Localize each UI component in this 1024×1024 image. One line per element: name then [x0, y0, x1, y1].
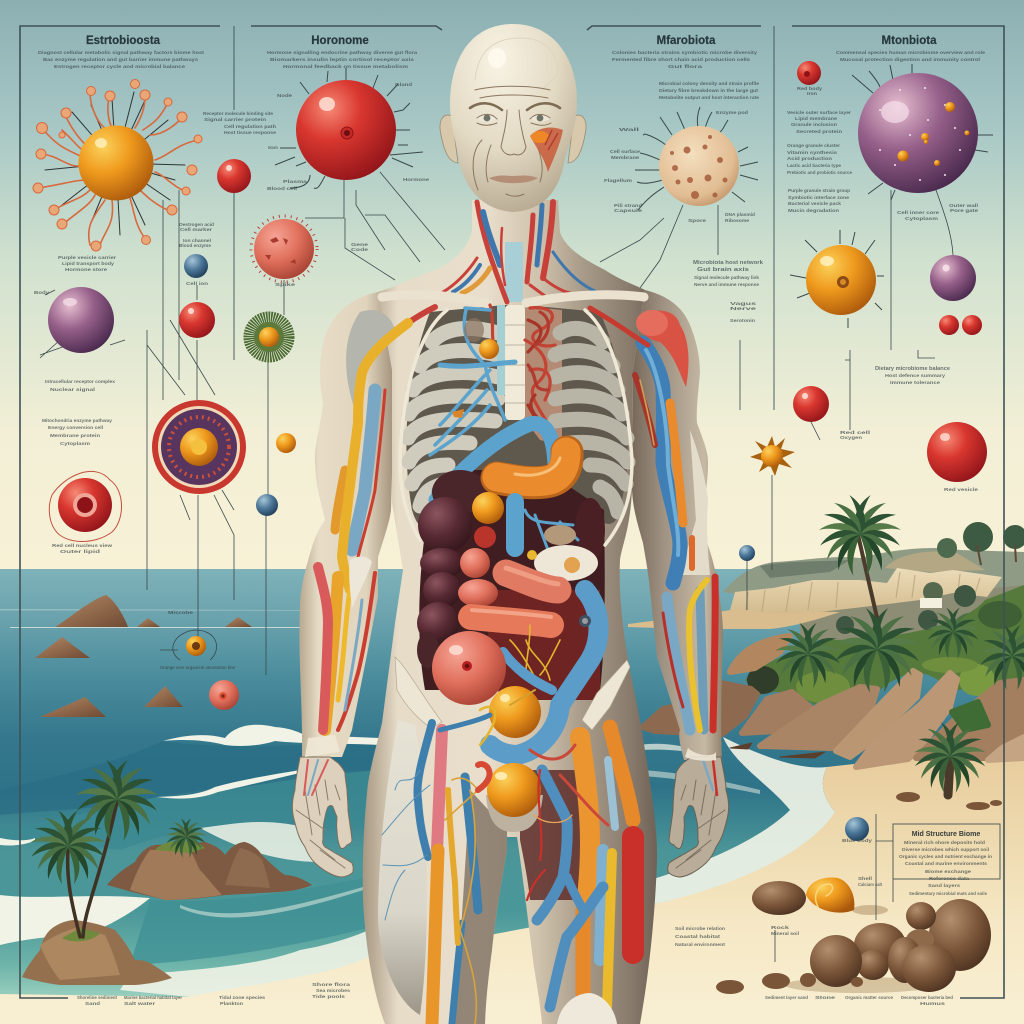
right arm vessels [590, 308, 715, 730]
annotation text: right columns: Enzyme pod [716, 110, 748, 115]
icon: ringed cell diagram [152, 400, 246, 494]
beach [0, 745, 1024, 1024]
annotation text: left columns: Node [277, 93, 293, 98]
annotation text: right columns: Soil microbe relation [675, 926, 725, 931]
intestines [458, 548, 558, 625]
annotation text: right columns: Cell surface [610, 149, 641, 154]
annotation text: right columns: Cytoplasm [905, 216, 938, 221]
annotation text: right columns: Granule inclusion [791, 122, 837, 127]
coastal rocks [643, 636, 1024, 767]
annotation text: left columns: Gland [395, 82, 412, 87]
annotation text: left columns: Orange core organism annotation line [160, 665, 235, 670]
annotation text: right columns: Tide pools [312, 994, 346, 999]
heading: column 1: Estrtobioosta [86, 35, 161, 47]
intro text blocks: Estrogen receptor cycle and microbial balance [54, 64, 186, 69]
annotation text: right columns: Organic matter source [845, 995, 893, 1000]
neck vessels [443, 202, 597, 302]
annotation text: left columns: Cytoplasm [60, 441, 90, 446]
annotation text: left columns: Shoreline sediment [77, 995, 117, 1000]
distant sand spit and hills [628, 522, 1024, 640]
palm trees: coast [775, 606, 1024, 795]
annotation text: right columns: Coastal habitat [675, 934, 721, 939]
annotation text: left columns: Ion channel [183, 238, 211, 243]
sea rocks left [35, 595, 252, 717]
background sky [0, 0, 1024, 575]
annotation text: right columns: Shell [858, 876, 872, 881]
annotation text: right columns: Calcium salt [858, 882, 882, 887]
icon: small red cell top right [797, 61, 821, 85]
annotation text: left columns: Ion [268, 145, 278, 150]
annotation text: left columns: Sand [85, 1001, 100, 1006]
annotation text: left columns: Cell ion [186, 281, 208, 286]
annotation text: right columns: Microbiota host network [693, 260, 764, 266]
annotation text: right columns: Sediment layer sand [765, 995, 808, 1000]
callout box: Sedimentary microbial mats and soils [909, 891, 987, 896]
left hand [292, 757, 353, 877]
annotation text: right columns: Vesicle outer surface layer [787, 110, 851, 115]
annotation text: right columns: Gut brain axis [697, 267, 749, 273]
white bone at leg bottom [557, 993, 617, 1024]
annotation text: right columns: Ribosome [725, 218, 749, 223]
annotation text: left columns: Microbe [168, 610, 194, 615]
annotation text: right columns: Nerve and immune response [694, 282, 759, 287]
icon: orange shell [806, 878, 888, 915]
annotation text: right columns: Microbial colony density and strain profile [659, 81, 759, 86]
heading: column 4: Mtonbiota [882, 35, 937, 47]
icon: purple sphere right [930, 255, 976, 301]
left shoulder cap [346, 310, 395, 407]
annotation text: right columns: Spore [688, 218, 707, 223]
abdomen red backdrop [480, 590, 600, 700]
annotation text: right columns: Purple granule strain group [788, 188, 850, 193]
pelvic bowl [486, 795, 543, 832]
annotation text: right columns: Wall [619, 127, 639, 132]
palm tree: cliff top [818, 493, 902, 622]
annotation text: right columns: Dietary fibre breakdown in the large gut [659, 88, 759, 93]
red vessel network [490, 305, 557, 445]
icon: small blue sphere right [739, 545, 755, 561]
abdomen cavity [419, 470, 605, 690]
wrist bands [305, 735, 716, 761]
icon: small red sphere [217, 159, 251, 193]
intro text blocks: Gut flora [668, 64, 703, 69]
annotation text: left columns: Plasma [283, 179, 308, 184]
annotation text: right columns: Cell inner core [897, 210, 940, 215]
icon: red sphere small 2 [179, 302, 215, 338]
annotation text: right columns: Lipid membrane [795, 116, 838, 121]
annotation text: right columns: Sea microbes [316, 988, 350, 993]
annotation text: left columns: Code [351, 247, 369, 252]
annotation text: right columns: Humus [920, 1001, 946, 1006]
annotation text: right columns: Orange granule cluster [787, 143, 840, 148]
annotation text: right columns: Dietary microbiome balance [875, 366, 950, 372]
annotation text: left columns: Gene [351, 242, 369, 247]
orange organ sphere [489, 686, 541, 738]
callout box: Sand layers [928, 883, 961, 888]
annotation text: left columns: Membrane protein [50, 433, 100, 438]
backdrop behind red vessels [525, 306, 562, 445]
intro text blocks: Hormone signalling endocrine pathway diverse gut flora [267, 50, 418, 55]
annotation text: right columns: Bacterial vesicle pack [788, 201, 841, 206]
annotation text: right columns: Natural environment [675, 942, 726, 947]
wave bands [0, 741, 380, 965]
orange stomach [497, 452, 567, 483]
annotation text: right columns: Signal molecule pathway link [694, 275, 759, 280]
annotation text: right columns: Nerve [730, 306, 757, 311]
left arm [299, 292, 395, 757]
chest cavity [406, 305, 628, 527]
annotation text: right columns: Iron [807, 91, 817, 96]
annotation text: right columns: Mineral soil [771, 931, 799, 936]
callout box: Diverse microbes which support soil [902, 847, 989, 852]
annotation text: right columns: Acid production [787, 156, 832, 161]
annotation text: left columns: Cell regulation path [224, 124, 276, 129]
intro text blocks: Biomarkers insulin leptin cortisol receptor axis [270, 57, 415, 62]
annotation text: left columns: Intracellular receptor complex [45, 379, 115, 384]
annotation text: right columns: Flagellum [604, 178, 632, 183]
large blue duct [490, 590, 598, 755]
callout box: Mineral rich shore deposits hold [904, 840, 985, 845]
icon: red cell with squiggle outline [49, 471, 122, 542]
icon: orange microbe with swirl [790, 230, 884, 328]
callout box: Coastal and marine environments [905, 861, 987, 866]
icon: small orange sphere [276, 433, 296, 453]
icon: blue sphere beach [845, 817, 869, 841]
callout box: Biome exchange [925, 869, 972, 874]
intro text blocks: Mucosal protection digestion and immunity control [840, 57, 980, 62]
intro text blocks: Fermented fibre short chain acid production cells [612, 57, 751, 62]
shoulder muscle red [636, 310, 688, 387]
icon: green spiky microbe [249, 317, 289, 357]
annotation text: left columns: Purple vesicle carrier [58, 255, 116, 260]
icon: large red sphere right [927, 422, 987, 482]
torso and legs [363, 200, 657, 1024]
duct nucleus [579, 615, 591, 627]
annotation text: right columns: Red cell [840, 430, 870, 435]
annotation text: left columns: Body [34, 290, 50, 295]
foreground rock island with palms [22, 758, 312, 985]
right arm [632, 290, 723, 760]
annotation text: left columns: Spike [275, 282, 296, 287]
liver lobes [417, 470, 605, 668]
icon: orange-red sphere [209, 680, 239, 710]
annotation text: right columns: Host defence summary [885, 373, 946, 378]
annotation text: right columns: Vagus [730, 301, 757, 306]
callout box: Organic cycles and nutrient exchange in [899, 854, 992, 859]
large blue vessel [429, 423, 555, 512]
annotation text: left columns: Marine bacterial habitat layer [124, 995, 182, 1000]
annotation text: right columns: Rock [771, 925, 790, 930]
left arm vessels [318, 307, 435, 730]
fine veins on left thigh [382, 770, 430, 920]
leader lines [40, 172, 953, 962]
annotation text: right columns: Membrane [611, 155, 640, 160]
annotation text: left columns: Host tissue response [224, 130, 276, 135]
intro text blocks: Commensal species human microbiome overview and role [836, 50, 986, 55]
callout box [893, 824, 1000, 896]
annotation text: right columns: Pore gate [950, 208, 979, 213]
annotation text: left columns: Receptor molecule binding site [203, 111, 273, 116]
small organs upper abdomen [472, 492, 598, 581]
right elbow pale [680, 430, 710, 575]
annotation text: right columns: Secreted protein [796, 129, 842, 134]
iliac bones [395, 657, 630, 730]
annotation text: left columns: Hormone [403, 177, 430, 182]
annotation text: right columns: Metabolite output and host interaction rate [659, 95, 759, 100]
annotation text: left columns: Energy conversion cell [48, 425, 103, 430]
annotation text: right columns: Serotonin [730, 318, 755, 323]
annotation text: right columns: Immune tolerance [890, 380, 941, 385]
orange bladder sphere [487, 763, 541, 817]
annotation text: right columns [312, 81, 979, 1006]
annotation text: right columns: Lactic acid bacteria type [787, 163, 841, 168]
sternum [497, 305, 525, 420]
icon: big purple speckled microbe [852, 64, 993, 200]
icon: big red hormone sphere [275, 68, 423, 188]
ribs [408, 328, 628, 512]
icon: small blue sphere lower [256, 494, 278, 516]
annotation text: right columns: Symbiotic interface zone [788, 195, 849, 200]
annotation text: left columns [34, 82, 430, 1006]
left elbow bone [349, 556, 372, 608]
annotation text: left columns: Blood enzyme [179, 243, 211, 248]
annotation text: left columns: Hormone store [65, 267, 108, 272]
leg vessels left [417, 707, 495, 1024]
annotation text: right columns: Decomposer bacteria bed [901, 995, 953, 1000]
icon: purple sphere [48, 287, 114, 353]
icon: tan speckled microbe [635, 107, 758, 210]
icon: spiky red microbe [251, 216, 317, 282]
annotation text: right columns: Oxygen [840, 435, 862, 440]
annotation text: right columns: Shore flora [312, 982, 351, 987]
heading: column 3: Mfarobiota [657, 35, 716, 47]
callout box: Reference data [929, 876, 970, 881]
blue vessels chest left [430, 308, 515, 455]
sea [0, 569, 1024, 1024]
icon: large orange tentacled microbe [33, 80, 202, 251]
thin yellow nerves in abdomen [510, 625, 560, 680]
wave foam [0, 609, 835, 997]
annotation text: right columns: Prebiotic and probiotic source [787, 170, 852, 175]
rib cage edge [400, 310, 632, 545]
intro text blocks: Colonies bacteria strains symbiotic microbe diversity [612, 50, 758, 55]
annotation text: right columns: Mucin degradation [788, 208, 839, 213]
annotation text: left columns: Blood cell [267, 186, 297, 191]
icon: twin red spheres [939, 315, 982, 335]
heading: column 2: Horonome [311, 35, 369, 47]
icon: red sphere mid [793, 386, 829, 422]
annotation text: left columns: Nuclear signal [50, 387, 95, 392]
pale left thigh [378, 720, 427, 1015]
ears [440, 115, 586, 163]
leg vessels right [527, 727, 633, 1007]
annotation text: right columns: Pili strand [614, 203, 642, 208]
annotation text: left columns: Tidal zone species [219, 995, 265, 1000]
orange node chest [452, 318, 499, 418]
annotation text: right columns: Red vesicle [944, 487, 979, 492]
annotation text: right columns: DNA plasmid [725, 212, 755, 217]
annotation text: right columns: Vitamin synthesis [787, 150, 838, 155]
annotation text: right columns: Capsule [614, 208, 643, 213]
left leg dark inner [455, 790, 507, 1024]
intro text blocks: Hormonal feedback on tissue metabolism [283, 64, 408, 69]
intro text blocks: Diagnost cellular metabolic signal pathway factors biome host [38, 50, 205, 55]
annotation text: left columns: Cell marker [180, 227, 212, 232]
annotation text: left columns: Signal carrier protein [204, 117, 266, 122]
intro text blocks: Bac enzyme regulation and gut barrier immune pathways [43, 57, 199, 62]
annotation text: right columns: Stone [815, 995, 836, 1000]
salmon sphere organ [432, 631, 506, 705]
head [450, 24, 577, 212]
annotation text: left columns: Outer lipid [60, 549, 100, 554]
icon: small blue sphere [184, 254, 208, 278]
figure: human anatomy [292, 24, 729, 1024]
clavicles [382, 295, 644, 304]
intro text blocks [38, 50, 986, 69]
face [470, 38, 563, 196]
icon: orange spiky star [750, 436, 795, 476]
annotation text: left columns: Mitochondria enzyme pathway [42, 418, 112, 423]
annotation text: left columns: Lipid transport body [62, 261, 115, 266]
annotation text: right columns: Red body [797, 86, 823, 91]
annotation text: left columns: Red cell nucleus view [52, 543, 113, 548]
beach boulders [716, 792, 1002, 994]
annotation text: right columns: Outer wall [949, 203, 978, 208]
callout box: Mid Structure Biome [912, 831, 980, 838]
right leg dark inner [520, 770, 585, 900]
icon: orange microbe in ring [186, 636, 206, 656]
annotation text: left columns: Plankton [220, 1001, 243, 1006]
right hand [668, 757, 729, 877]
annotation text: right columns: Blue body [842, 838, 873, 843]
annotation text: left columns: Oestrogen acid [179, 222, 214, 227]
annotation text: left columns: Salt water [124, 1001, 155, 1006]
coastal vegetation [745, 585, 1024, 705]
